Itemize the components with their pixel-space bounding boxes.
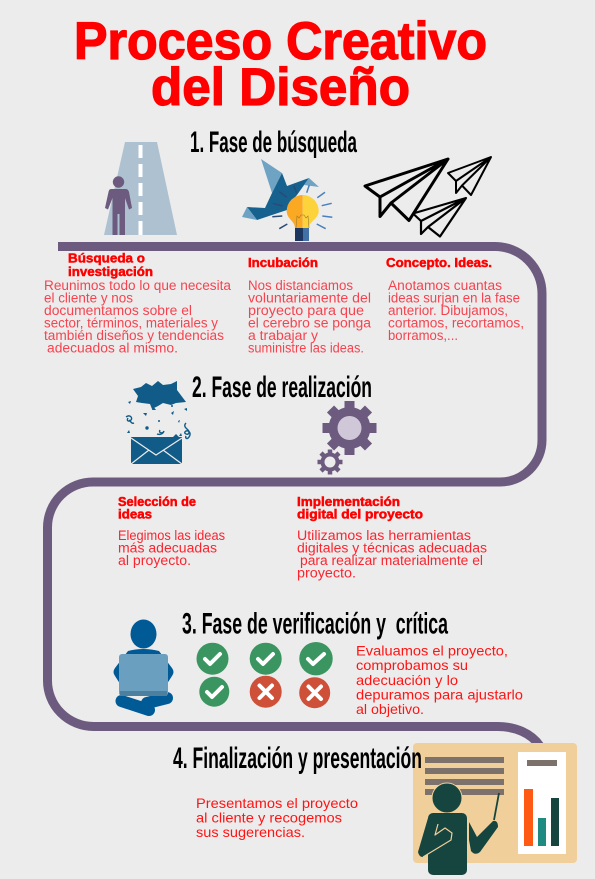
column: concepto, ideas: Concepto. Ideas.	[386, 255, 492, 270]
column: implementación digital: digitales y técnicas adecuadas	[297, 540, 487, 556]
icon: verification checks	[196, 642, 333, 708]
column: incubación: voluntariamente del	[248, 290, 371, 306]
column: concepto, ideas: anterior. Dibujamos,	[388, 303, 508, 318]
column: concepto, ideas: borramos,...	[388, 328, 458, 343]
column: concepto, ideas: ideas surjan en la fase	[388, 290, 520, 306]
winding path connector	[47, 246, 542, 746]
column: búsqueda o investigación: documentamos sobre el	[44, 303, 192, 318]
text: presentación: al cliente y recogemos	[196, 810, 342, 826]
column: concepto, ideas: Anotamos cuantas	[388, 278, 502, 293]
column: búsqueda o investigación: adecuados al mismo.	[47, 340, 178, 356]
column: selección de ideas	[118, 494, 225, 568]
column: implementación digital: proyecto.	[297, 566, 356, 580]
column: selección de ideas: al proyecto.	[118, 553, 191, 568]
column: incubación: suministre las ideas.	[248, 340, 364, 356]
column: implementación digital: para realizar materialmente el	[300, 553, 483, 568]
column: búsqueda o investigación: también diseños y tendencias	[44, 328, 224, 343]
icon: paper planes	[365, 157, 491, 236]
text: evaluación: depuramos para ajustarlo	[356, 686, 523, 702]
column: selección de ideas: Selección de	[118, 494, 196, 509]
icon: presenter at board with bar chart	[413, 743, 577, 875]
text: evaluación: adecuación y lo	[356, 672, 458, 688]
column: concepto, ideas: cortamos, recortamos,	[388, 316, 524, 330]
heading: fase 1: 1. Fase de búsqueda	[190, 126, 357, 159]
column: búsqueda o investigación: el cliente y nos	[44, 290, 133, 306]
column: incubación: Incubación	[248, 255, 318, 270]
column: implementación digital	[297, 494, 487, 580]
column: selección de ideas: ideas	[118, 506, 152, 522]
icon: gears	[318, 401, 376, 474]
column: incubación: a trabajar y	[248, 328, 318, 343]
icon: person with laptop	[114, 620, 174, 710]
column: selección de ideas: más adecuadas	[118, 540, 217, 556]
title	[74, 12, 487, 117]
text: evaluación	[356, 642, 523, 717]
column: incubación: el cerebro se ponga	[248, 316, 371, 330]
text: presentación: sus sugerencias.	[196, 824, 305, 840]
column: búsqueda o investigación: investigación	[68, 264, 153, 279]
title: Proceso Creativo	[74, 12, 487, 71]
text: evaluación: comprobamos su	[356, 657, 468, 673]
column: implementación digital: Utilizamos las herramientas	[297, 528, 471, 543]
column: implementación digital: Implementación	[297, 494, 400, 509]
icon: envelope with burst and confetti	[126, 381, 190, 464]
column: búsqueda o investigación: sector, términos, materiales y	[44, 316, 218, 330]
column: búsqueda o investigación: Búsqueda o	[68, 250, 145, 266]
text: evaluación: al objetivo.	[356, 701, 424, 717]
column: selección de ideas: Elegimos las ideas	[118, 528, 225, 543]
text: evaluación: Evaluamos el proyecto,	[356, 642, 508, 658]
title: del Diseño	[151, 58, 410, 117]
column: búsqueda o investigación: Reunimos todo lo que necesita	[44, 278, 231, 293]
icon: road with person	[104, 142, 177, 235]
text: presentación: Presentamos el proyecto	[196, 795, 358, 811]
column: búsqueda o investigación	[44, 250, 231, 356]
column: incubación: Nos distanciamos	[248, 278, 353, 293]
heading: fase 4: 4. Finalización y presentación	[173, 742, 422, 775]
icon: origami bird with lightbulb	[242, 159, 332, 241]
column: implementación digital: digital del proyecto	[297, 506, 423, 522]
column: concepto, ideas	[386, 255, 524, 343]
text: presentación	[196, 795, 358, 840]
column: incubación: proyecto para que	[248, 303, 364, 318]
column: incubación	[248, 255, 371, 356]
heading: fase 2: 2. Fase de realización	[192, 371, 372, 404]
